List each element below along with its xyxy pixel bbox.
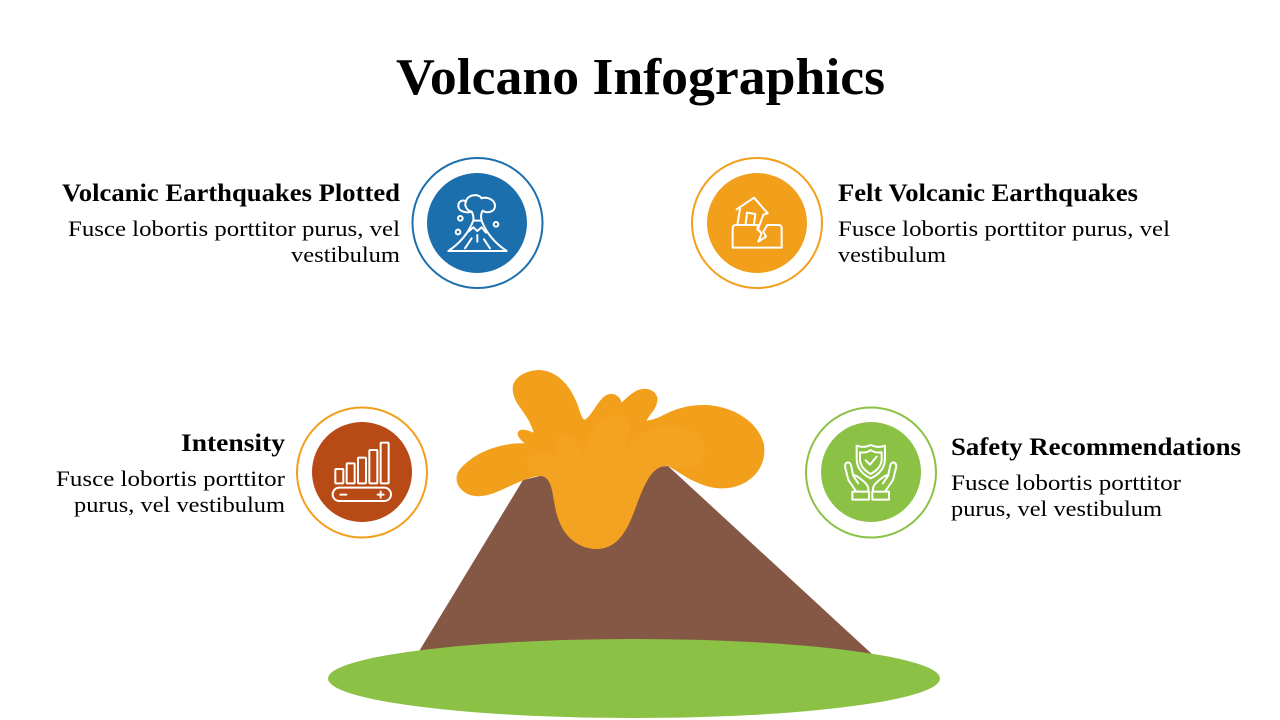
grass ellipse bbox=[328, 639, 940, 718]
text block: volcanic earthquakes description: vestibulum bbox=[291, 242, 401, 267]
text block: intensity description: purus, vel vestibulum bbox=[74, 492, 286, 517]
icon: shield and hands in green circle bbox=[806, 408, 936, 538]
panel: safety recommendations bbox=[806, 408, 1241, 538]
text block: intensity description bbox=[56, 466, 286, 517]
heading: felt volcanic earthquakes: Felt Volcanic Earthquakes bbox=[838, 180, 1138, 207]
panel: volcanic earthquakes plotted bbox=[62, 158, 542, 288]
heading: safety recommendations: Safety Recommendations bbox=[951, 434, 1241, 461]
heading: intensity: Intensity bbox=[181, 430, 286, 457]
text block: intensity description: Fusce lobortis porttitor bbox=[56, 466, 286, 491]
text block: felt earthquakes description bbox=[838, 216, 1170, 267]
text block: volcanic earthquakes description: Fusce lobortis porttitor purus, vel bbox=[68, 216, 400, 241]
mountain bbox=[418, 466, 873, 655]
text block: felt earthquakes description: Fusce lobortis porttitor purus, vel bbox=[838, 216, 1170, 241]
icon: intensity bars in rust circle bbox=[297, 408, 427, 538]
panel: intensity bbox=[56, 408, 427, 538]
text block: safety description bbox=[951, 470, 1182, 521]
heading: volcanic earthquakes plotted: Volcanic Earthquakes Plotted bbox=[62, 180, 400, 207]
text block: safety description: purus, vel vestibulum bbox=[951, 496, 1163, 521]
panel: felt volcanic earthquakes bbox=[692, 158, 1170, 288]
volcano illustration bbox=[328, 370, 940, 718]
text block: volcanic earthquakes description bbox=[68, 216, 401, 267]
icon: erupting volcano in blue circle bbox=[412, 158, 542, 288]
lava eruption bbox=[457, 370, 764, 549]
text block: felt earthquakes description: vestibulum bbox=[838, 242, 947, 267]
icon: cracked house in orange circle bbox=[692, 158, 822, 288]
text block: safety description: Fusce lobortis porttitor bbox=[951, 470, 1182, 495]
title: Volcano Infographics bbox=[396, 49, 885, 106]
